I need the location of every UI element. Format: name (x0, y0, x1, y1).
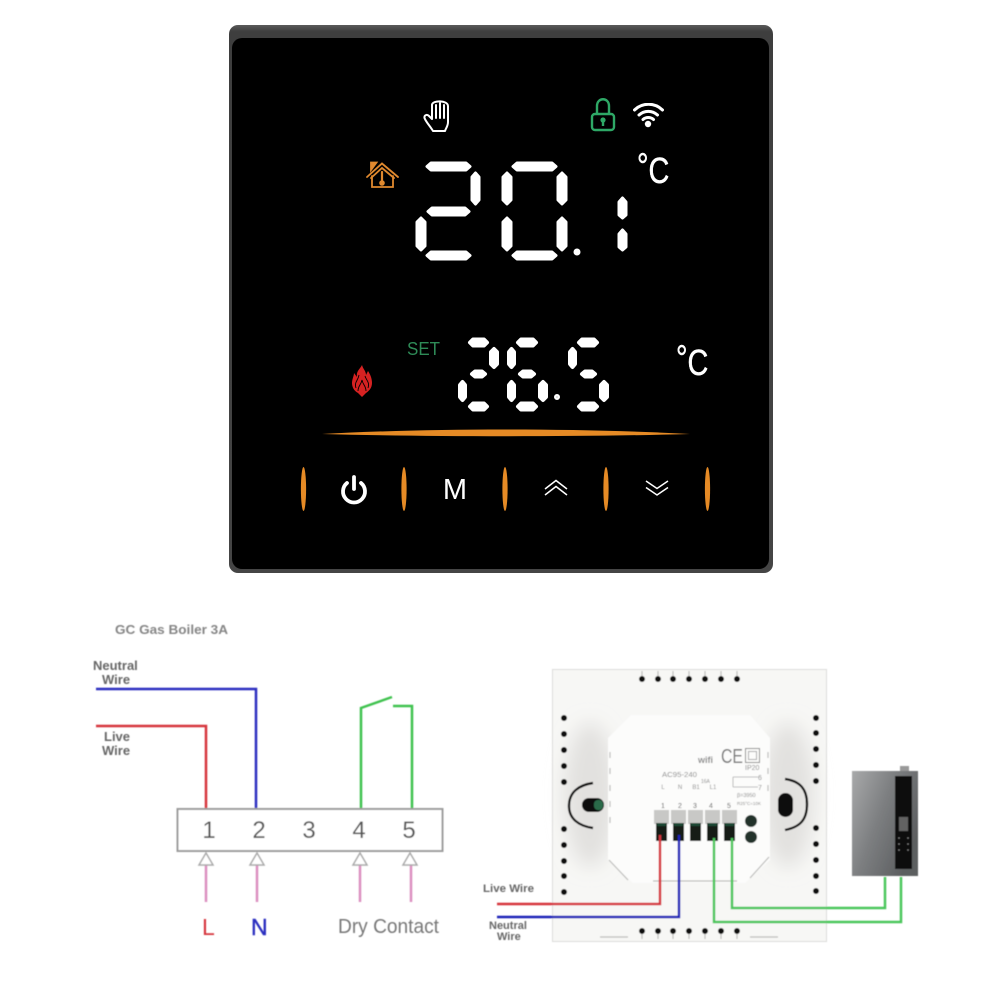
label: L: L (202, 914, 215, 940)
icon: up chevrons (545, 480, 567, 495)
terminal block (178, 809, 442, 851)
neutral wire to terminal 2 (497, 835, 679, 917)
rear label text: 1 (661, 803, 665, 810)
gas boiler (852, 766, 918, 876)
current temperature unit: ° (637, 145, 649, 186)
rear label text: L (661, 785, 665, 791)
current temperature 20.1 (417, 163, 626, 259)
terminal connectors (654, 810, 757, 843)
terminal block: 4 (352, 817, 366, 844)
dry contact switch lines (361, 697, 412, 808)
label: live wire: Wire (102, 743, 130, 758)
rear label text: B1 (692, 785, 700, 791)
thermostat rear view (483, 670, 918, 943)
rear label text: 3 (693, 803, 697, 810)
rear label text: R25°C=10K (737, 801, 761, 806)
icon: lock (592, 99, 614, 130)
thermostat front panel (229, 25, 773, 573)
terminal block: 2 (252, 817, 266, 844)
set temperature unit: ° (676, 337, 688, 378)
icon: down chevrons (646, 481, 668, 495)
wiring schematic (93, 622, 442, 940)
centre housing (608, 715, 770, 883)
divider glow line (322, 430, 690, 436)
schematic title: GC Gas Boiler 3A (115, 622, 229, 637)
live wire to terminal 1 (497, 835, 660, 904)
green wire terminal 4 to boiler (714, 838, 901, 922)
side shading (564, 723, 814, 867)
rear label text: CE (721, 746, 743, 768)
live wire line (96, 726, 206, 808)
label: neutral wire: Neutral (489, 920, 527, 932)
button: M: M (443, 474, 467, 506)
icon: manual hand (424, 101, 448, 131)
rear label text: β=3950 (737, 793, 756, 799)
green wire terminal 5 to boiler (732, 838, 885, 908)
left mounting slot (569, 783, 604, 828)
rear label text (661, 746, 762, 810)
icon: house temperature (367, 162, 398, 187)
rear label text: AC95-240 (662, 770, 697, 779)
rear label text: N (678, 785, 682, 791)
icon: power button (343, 477, 365, 502)
mounting dots (561, 676, 819, 934)
set temperature 26.5 (460, 340, 607, 410)
terminal block: 3 (302, 817, 316, 844)
label: dry contact: Dry Contact (338, 916, 439, 938)
right mounting slot (778, 779, 807, 830)
rear label text: 6 (758, 775, 762, 782)
label: live wire: Live Wire (483, 883, 534, 895)
housing edge marks (600, 671, 778, 939)
current temperature unit: C (649, 150, 669, 191)
icon: wifi (634, 104, 662, 127)
set temperature unit: C (688, 342, 708, 383)
rear label text: 2 (678, 803, 682, 810)
rear label text: IP20 (745, 765, 760, 772)
label: SET: SET (407, 339, 440, 359)
neutral wire line (96, 689, 256, 808)
terminal block: 5 (402, 817, 416, 844)
rear label text: 4 (709, 803, 713, 810)
input arrows (199, 853, 417, 902)
rear label text: 5 (727, 803, 731, 810)
rear label text: L1 (710, 785, 717, 791)
rear label text: 16A (701, 779, 711, 785)
label: N: N (251, 914, 268, 940)
label: live wire: Live (104, 729, 130, 744)
label: neutral wire: Wire (497, 931, 521, 943)
rear label text: wifi (697, 755, 713, 765)
icon: flame (352, 365, 372, 397)
label: neutral wire: Neutral (93, 658, 138, 673)
label: neutral wire: Wire (102, 672, 130, 687)
rear label text: 7 (758, 785, 762, 792)
terminal block: 1 (202, 817, 216, 844)
touch button separators (301, 467, 710, 511)
